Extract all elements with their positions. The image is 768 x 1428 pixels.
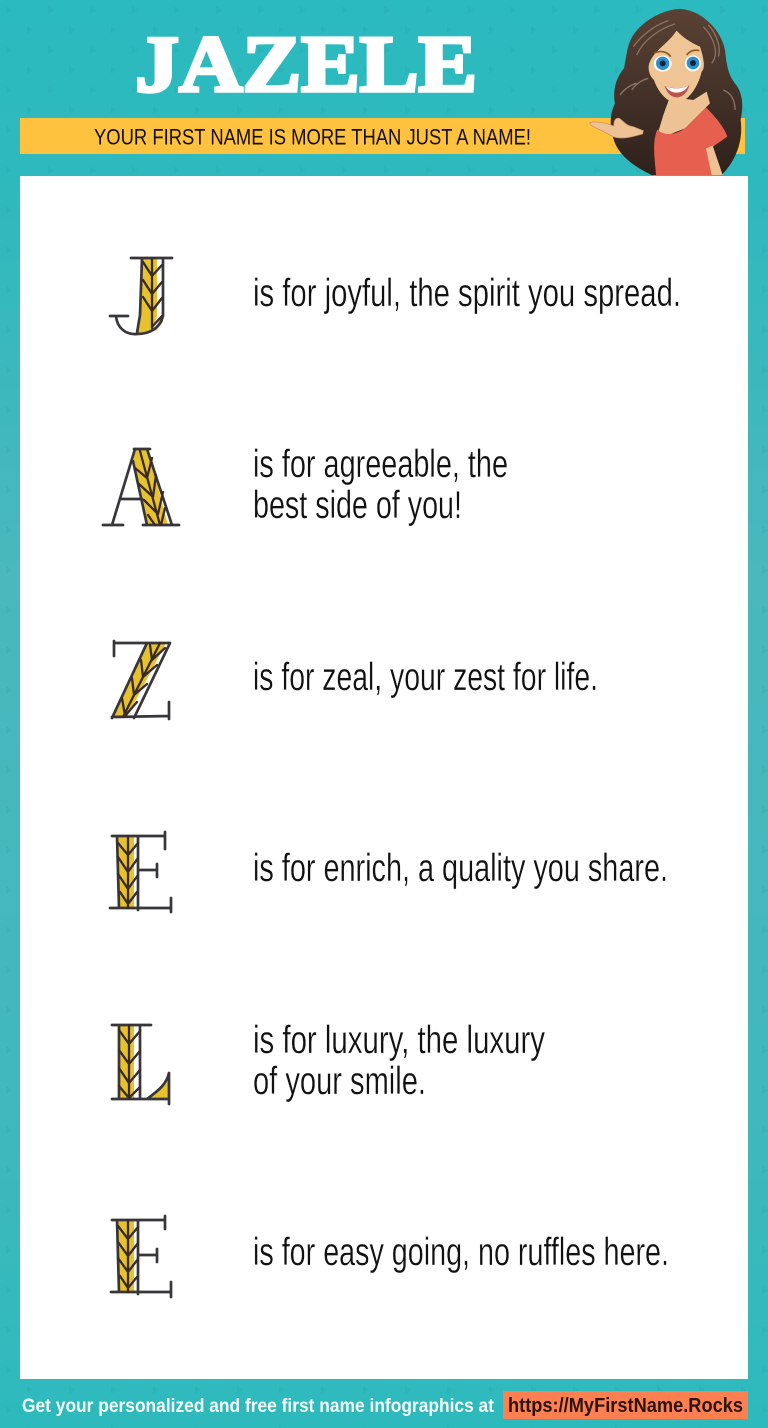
icon: left eye bbox=[654, 56, 672, 72]
icon: mouth bbox=[665, 85, 689, 97]
icon: hair bbox=[611, 9, 742, 175]
letter A bbox=[103, 449, 179, 525]
footer bbox=[22, 1391, 748, 1419]
icon: right eye bbox=[685, 55, 701, 71]
letter E bbox=[110, 832, 171, 912]
letter J bbox=[110, 258, 172, 334]
character illustration bbox=[590, 9, 742, 175]
line 2: of your smile. bbox=[253, 1060, 426, 1103]
row: J bbox=[110, 258, 681, 334]
icon: face bbox=[649, 31, 704, 103]
text: L bbox=[253, 1019, 545, 1103]
white content panel bbox=[20, 176, 748, 1379]
text: A bbox=[253, 443, 508, 527]
letter L bbox=[112, 1025, 169, 1104]
letter E second bbox=[111, 1216, 171, 1297]
row: Z bbox=[112, 641, 598, 719]
footer text: Get your personalized and free first name infographics at bbox=[22, 1395, 494, 1417]
title: JAZELE bbox=[135, 21, 477, 109]
line 1: is for luxury, the luxury bbox=[253, 1019, 545, 1062]
tagline banner bbox=[20, 118, 745, 154]
row: E second bbox=[111, 1216, 669, 1297]
footer link badge: https://MyFirstName.Rocks bbox=[508, 1395, 743, 1417]
row: E bbox=[110, 832, 668, 912]
icon: hair strands bbox=[620, 21, 735, 110]
line 2: best side of you! bbox=[253, 484, 462, 527]
icon: neck and chest bbox=[658, 92, 710, 135]
icon: eyebrows bbox=[654, 50, 699, 57]
icon: hand bbox=[590, 118, 643, 138]
letter Z bbox=[112, 641, 170, 719]
row: A bbox=[103, 443, 508, 527]
icon: shirt bbox=[654, 107, 727, 175]
tagline text: YOUR FIRST NAME IS MORE THAN JUST A NAME! bbox=[94, 124, 531, 150]
row: L bbox=[112, 1019, 545, 1104]
line 1: is for agreeable, the bbox=[253, 443, 508, 486]
text: Z: is for zeal, your zest for life. bbox=[253, 656, 598, 699]
icon: arm bbox=[706, 146, 723, 175]
